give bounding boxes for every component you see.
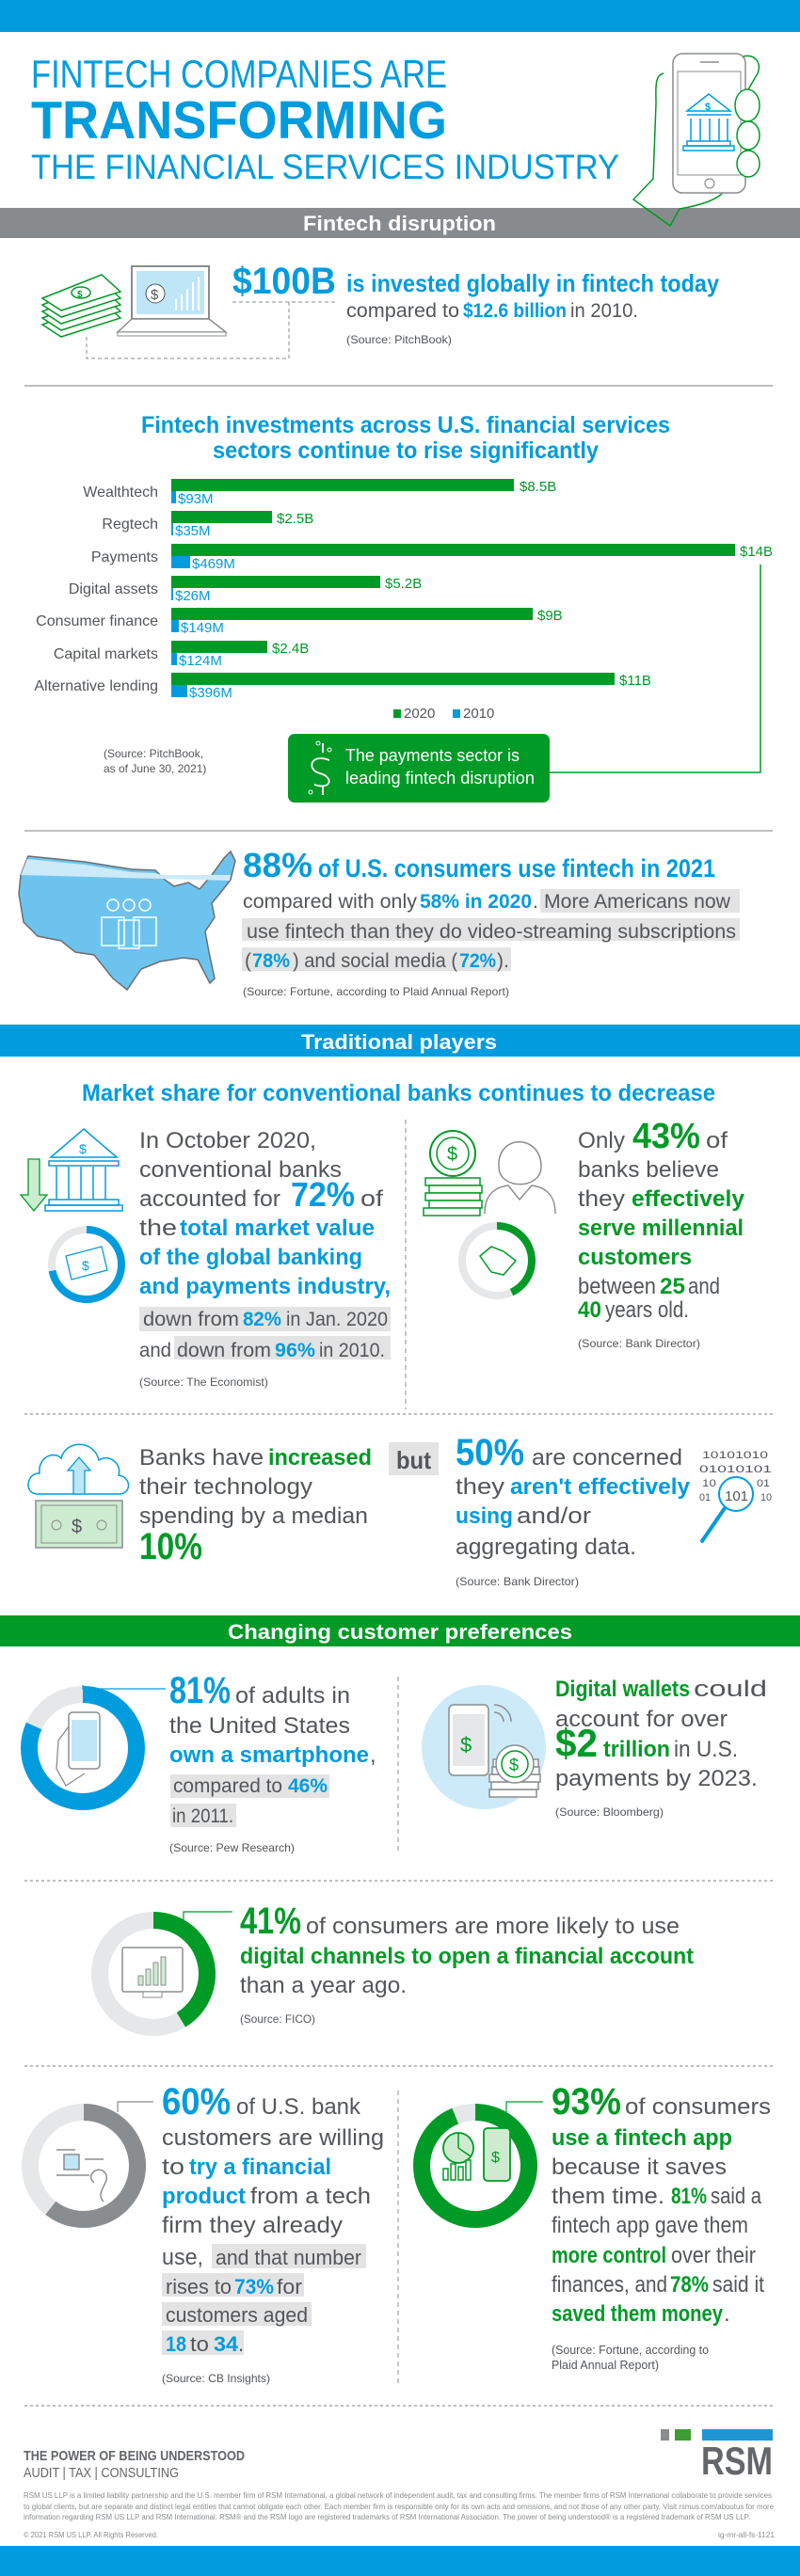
stat: $100B <box>232 261 719 346</box>
icon: hand holding phone: $ <box>705 102 711 113</box>
text: market value 72%: the <box>139 1216 177 1241</box>
bar chart: $396M <box>189 685 232 701</box>
chart heading: Fintech investments across U.S. financial services <box>141 412 670 438</box>
legend: 2020 <box>404 706 435 722</box>
text: market value 72%: In October 2020, <box>139 1128 316 1153</box>
blue band: Traditional players <box>0 1025 800 1057</box>
bar chart: $9B <box>537 608 563 624</box>
bar chart: $11B <box>619 673 651 689</box>
text: 50% concerned: they <box>456 1474 504 1500</box>
text: 81%: , <box>370 1742 376 1768</box>
text: 41%: 41% <box>240 1900 301 1942</box>
text: 93%: said a <box>711 2184 762 2209</box>
source: chart: (Source: PitchBook, <box>104 747 203 760</box>
text: 93%: use a fintech app <box>552 2125 732 2151</box>
text: banks increased spending: Banks have <box>139 1445 264 1471</box>
text: market value 72%: accounted for <box>139 1186 280 1212</box>
gray band: Fintech disruption <box>0 208 800 238</box>
RSM logo: RSM <box>701 2439 773 2483</box>
text: 60%: customers are willing <box>162 2125 384 2151</box>
text: 81%: in 2011. <box>172 1805 233 1827</box>
dashed connector <box>87 302 335 358</box>
text: 60% <box>162 2081 384 2385</box>
disclaimer: © 2021 RSM US LLP. All Rights Reserved. <box>24 2531 158 2539</box>
bar chart: Capital markets <box>54 646 158 662</box>
text: banks increased spending: their technology <box>139 1474 312 1500</box>
text: digital wallets: trillion <box>603 1737 670 1762</box>
text: 43% millennial: they <box>578 1186 625 1212</box>
text: 43% millennial: years old. <box>605 1297 689 1323</box>
stat: 88%: ) and social media ( <box>293 950 457 972</box>
bar chart: Payments <box>91 549 158 565</box>
text: banks increased spending: increased <box>268 1445 372 1471</box>
text: market value 72%: in 2010. <box>319 1340 385 1361</box>
bar chart: $35M <box>175 523 211 539</box>
stat: 88%: use fintech than they do video-streaming subscriptions <box>247 921 736 943</box>
chart heading: sectors continue to rise significantly <box>213 437 599 464</box>
text: market value 72%: of the global banking <box>139 1245 362 1270</box>
text: 50% concerned: using <box>456 1503 513 1529</box>
stat: 88%: 78% <box>252 950 290 972</box>
text: 60%: firm they already <box>162 2213 343 2238</box>
text: market value 72%: (Source: The Economist) <box>139 1375 268 1389</box>
connector arrow to callout <box>550 564 760 772</box>
text: 41%: of consumers are more likely to use <box>306 1914 680 1939</box>
text: 93%: of consumers <box>625 2094 771 2120</box>
text: market value 72%: down from <box>177 1340 271 1361</box>
icon: binary magnifier: 01010101 <box>699 1464 772 1475</box>
icon: digital wallet: $ <box>460 1733 472 1757</box>
icon: bank with down arrow <box>21 1129 122 1211</box>
text: 50% concerned: and/or <box>517 1503 591 1529</box>
text: 60%: of U.S. bank <box>236 2094 361 2120</box>
text: 50% concerned: (Source: Bank Director) <box>456 1575 579 1588</box>
text: banks increased spending: spending by a median <box>139 1503 368 1529</box>
bar chart: Wealthtech <box>83 485 158 501</box>
stat: 88%: (Source: Fortune, according to Plaid Annual Report) <box>243 985 509 998</box>
stat: 88%: 58% in 2020 <box>420 891 532 913</box>
text: 93%: fintech app gave them <box>552 2213 748 2238</box>
disclaimer <box>24 2491 776 2539</box>
text: market value 72%: total market value <box>180 1216 375 1241</box>
text: 60%: product <box>162 2184 246 2209</box>
text: market value 72%: of <box>360 1186 383 1212</box>
text: 93%: . <box>724 2301 730 2327</box>
icon: US map with people <box>19 851 235 990</box>
text: digital wallets: payments by 2023. <box>555 1766 758 1791</box>
text: 43% millennial: and <box>688 1274 720 1299</box>
text: 93%: over their <box>671 2243 756 2268</box>
text: 41%: digital channels to open a financial account <box>240 1944 694 1969</box>
text: digital wallets: (Source: Bloomberg) <box>555 1805 664 1819</box>
text: 60%: 18 <box>166 2332 186 2356</box>
text: market value 72%: 82% <box>243 1309 281 1330</box>
text: 93%: because it saves <box>552 2155 727 2180</box>
text: market value 72%: 96% <box>275 1340 315 1361</box>
source: chart: as of June 30, 2021) <box>104 762 206 775</box>
text: 43% millennial: (Source: Bank Director) <box>578 1337 700 1350</box>
icon: binary magnifier: 10 <box>760 1492 772 1503</box>
text: 43% millennial: serve millennial <box>578 1216 744 1241</box>
footer tagline: AUDIT | TAX | CONSULTING <box>24 2465 179 2481</box>
text: 60%: to <box>190 2332 209 2356</box>
bar chart: $8.5B <box>520 479 556 495</box>
icon: hand holding phone <box>633 54 760 226</box>
text: 93%: Plaid Annual Report) <box>552 2358 659 2372</box>
text: market value 72%: in Jan. 2020 <box>286 1309 388 1330</box>
text: 60%: 73% <box>234 2275 274 2298</box>
bottom bar <box>0 2546 800 2576</box>
heading: market share: Market share for conventional banks continues to decrease <box>82 1080 715 1106</box>
stat: 88%: More Americans now <box>544 891 731 913</box>
gray band: Fintech disruption: Fintech disruption <box>303 212 496 235</box>
text: 60%: 34 <box>214 2332 239 2356</box>
donut: 81% smartphone <box>29 1685 166 1802</box>
text: 60%: use, <box>162 2245 203 2270</box>
footer tagline <box>24 2448 245 2481</box>
bar chart: $2.4B <box>272 641 309 657</box>
text: 81% <box>169 1670 376 1854</box>
text: digital wallets: $2 <box>555 1721 598 1765</box>
stat: 88%: of U.S. consumers use fintech in 2021 <box>318 854 715 883</box>
text: 81%: compared to <box>173 1775 282 1797</box>
bar chart <box>34 479 773 701</box>
text: market value 72%: and payments industry, <box>139 1274 391 1299</box>
icon: coin, books, banker: $ <box>447 1144 457 1165</box>
text: banks increased spending <box>139 1445 372 1567</box>
text: 43% millennial: Only <box>578 1128 625 1153</box>
but box <box>389 1442 439 1475</box>
stat: $100B: in 2010. <box>570 300 638 322</box>
text: 41%: than a year ago. <box>240 1973 407 1998</box>
text: 50% concerned: are concerned <box>532 1445 682 1471</box>
text: 43% millennial: 40 <box>578 1297 601 1323</box>
bar chart: Digital assets <box>69 581 158 597</box>
title: TRANSFORMING <box>31 90 447 151</box>
bar chart: Alternative lending <box>34 678 158 694</box>
footer tagline: THE POWER OF BEING UNDERSTOOD <box>24 2448 245 2464</box>
text: 50% concerned: aggregating data. <box>456 1534 636 1560</box>
text: 43% millennial: effectively <box>632 1186 745 1212</box>
text: 93%: (Source: Fortune, according to <box>552 2343 709 2357</box>
donut: 60% <box>30 2102 153 2219</box>
bar chart: $26M <box>175 588 211 604</box>
disclaimer: RSM US LLP is a limited liability partnership and the U.S. member firm of RSM International, a global network of independent audit, tax and consulting firms. The member firms of RSM International collaborate to provide services <box>24 2491 772 2500</box>
but box: but <box>396 1446 431 1474</box>
stat: $100B: (Source: PitchBook) <box>346 333 452 346</box>
text: 60%: for <box>277 2275 302 2298</box>
icon: binary magnifier: 01 <box>757 1478 770 1489</box>
source: chart <box>104 747 206 775</box>
donut: 72%: $ <box>82 1258 89 1273</box>
title: FINTECH COMPANIES ARE <box>31 52 447 96</box>
text: 60%: and that number <box>216 2246 361 2269</box>
stat: $100B: is invested globally in fintech today <box>346 269 719 297</box>
icon: coin, books, banker <box>424 1131 555 1216</box>
text: 60%: customers aged <box>166 2303 308 2327</box>
icon: binary magnifier <box>699 1450 772 1541</box>
callout: payments leading: The payments sector is <box>345 746 520 765</box>
text: 43% millennial: 25 <box>660 1274 685 1299</box>
text: digital wallets: Digital wallets <box>555 1677 690 1702</box>
text: market value 72% <box>139 1128 391 1389</box>
bar chart: Consumer finance <box>36 613 158 629</box>
text: 43% millennial <box>578 1117 745 1350</box>
chart heading <box>141 412 670 464</box>
text: 41%: (Source: FICO) <box>240 2012 315 2026</box>
text: 60%: 60% <box>162 2081 231 2123</box>
text: 43% millennial: 43% <box>632 1117 700 1156</box>
bar chart: $124M <box>179 653 222 669</box>
icon: binary magnifier: 01 <box>699 1492 711 1503</box>
callout: payments leading: leading fintech disruption <box>345 769 535 787</box>
text: market value 72%: and <box>139 1340 171 1361</box>
stat: 88%: ). <box>497 950 509 972</box>
donut: 43% <box>462 1226 532 1296</box>
text: 81%: 46% <box>288 1775 328 1797</box>
text: 81%: (Source: Pew Research) <box>169 1841 295 1854</box>
disclaimer: ig-mr-all-fs-1121 <box>718 2531 776 2539</box>
text: 93%: saved them money <box>552 2301 724 2327</box>
disclaimer: to global clients, but are separate and distinct legal entities that cannot obligate each other. Each member firm is responsible only for its own acts and omissions, and not those of any other party. Visit rsmus.com/aboutus for more <box>24 2503 775 2511</box>
title: THE FINANCIAL SERVICES INDUSTRY <box>31 148 619 186</box>
stat: 88%: 72% <box>459 950 496 972</box>
donut: 72% <box>52 1230 121 1299</box>
bar chart: $149M <box>181 620 224 636</box>
stat: 88%: . <box>533 891 538 913</box>
text: digital wallets: in U.S. <box>674 1737 738 1762</box>
bar chart: Regtech <box>102 517 158 533</box>
stat: $100B: $100B <box>232 261 336 302</box>
text: market value 72%: down from <box>143 1309 239 1330</box>
icon: cloud and bill: $ <box>72 1517 82 1537</box>
text: 60%: from a tech <box>250 2184 371 2209</box>
text: 43% millennial: between <box>578 1274 656 1299</box>
text: 81%: the United States <box>169 1713 350 1739</box>
text: market value 72%: conventional banks <box>139 1157 342 1183</box>
donut: 93%: $ <box>491 2150 500 2166</box>
disclaimer: information regarding RSM US LLP and RSM International. RSM® and the RSM logo are registered trademarks of RSM International Association. The power of being understood® is a registered trademark of RSM US LLP. <box>24 2513 750 2521</box>
text: 93%: 81% <box>671 2184 707 2209</box>
icon: binary magnifier: 10101010 <box>702 1450 768 1461</box>
green band: Changing customer preferences: Changing customer preferences <box>228 1620 572 1644</box>
text: 50% concerned: 50% <box>456 1432 524 1473</box>
text: 50% concerned: aren't effectively <box>510 1474 691 1500</box>
donut: 93% <box>422 2102 543 2219</box>
text: 60%: . <box>238 2332 244 2356</box>
text: 81%: own a smartphone <box>169 1742 369 1768</box>
green band: Changing customer preferences <box>0 1615 800 1646</box>
stat: 88% <box>242 846 740 998</box>
text: 43% millennial: customers <box>578 1245 692 1270</box>
bar chart: $5.2B <box>385 576 422 592</box>
text: digital wallets: could <box>694 1677 767 1702</box>
bar chart: $93M <box>178 491 214 507</box>
bar chart: $469M <box>192 556 235 572</box>
icon: money stack and laptop: $ <box>151 287 159 303</box>
text: 43% millennial: of <box>706 1128 728 1153</box>
text: 93%: finances, and <box>552 2272 667 2298</box>
text: 50% concerned <box>456 1432 691 1588</box>
icon: binary magnifier: 101 <box>725 1488 748 1504</box>
text: 93%: more control <box>552 2243 666 2268</box>
icon: digital wallet: $ <box>509 1756 519 1774</box>
text: 60%: (Source: CB Insights) <box>162 2372 270 2385</box>
text: digital wallets <box>555 1677 767 1819</box>
text: 81%: of adults in <box>235 1683 350 1709</box>
text: 93%: 93% <box>552 2081 621 2123</box>
text: market value 72%: 72% <box>291 1175 355 1214</box>
RSM logo <box>661 2429 773 2483</box>
text: 93%: said it <box>712 2272 764 2298</box>
callout: payments leading <box>288 734 550 803</box>
stat: 88%: ( <box>245 950 251 972</box>
legend: 2010 <box>463 706 494 722</box>
icon: money stack and laptop: $ <box>77 290 83 300</box>
text: 60%: rises to <box>166 2275 232 2298</box>
blue band: Traditional players: Traditional players <box>301 1030 497 1054</box>
text: 60%: try a financial <box>189 2155 331 2180</box>
stat: 88%: compared with only <box>243 891 418 913</box>
icon: money stack and laptop <box>42 266 226 337</box>
text: 93% <box>552 2081 771 2372</box>
text: 93%: 78% <box>670 2272 709 2298</box>
icon: digital wallet <box>422 1685 546 1809</box>
text: 93%: them time. <box>552 2184 664 2209</box>
text: 60%: to <box>162 2155 184 2180</box>
icon: binary magnifier: 10 <box>702 1478 716 1489</box>
stat: $100B: compared to <box>346 300 459 322</box>
legend <box>393 706 494 722</box>
icon: cloud and bill <box>28 1444 129 1548</box>
text: digital wallets: account for over <box>555 1707 728 1732</box>
stat: $100B: $12.6 billion <box>463 300 567 322</box>
text: 41% <box>240 1900 694 2026</box>
text: 43% millennial: banks believe <box>578 1157 719 1183</box>
stat: 88%: 88% <box>243 846 312 884</box>
top bar <box>0 0 800 32</box>
title <box>31 52 619 186</box>
donut: 41% <box>100 1912 232 2027</box>
bar chart: $14B <box>740 544 773 560</box>
bar chart: $2.5B <box>277 511 313 527</box>
text: banks increased spending: 10% <box>139 1526 202 1567</box>
icon: bank with down arrow: $ <box>79 1141 87 1156</box>
text: 81%: 81% <box>169 1670 231 1711</box>
